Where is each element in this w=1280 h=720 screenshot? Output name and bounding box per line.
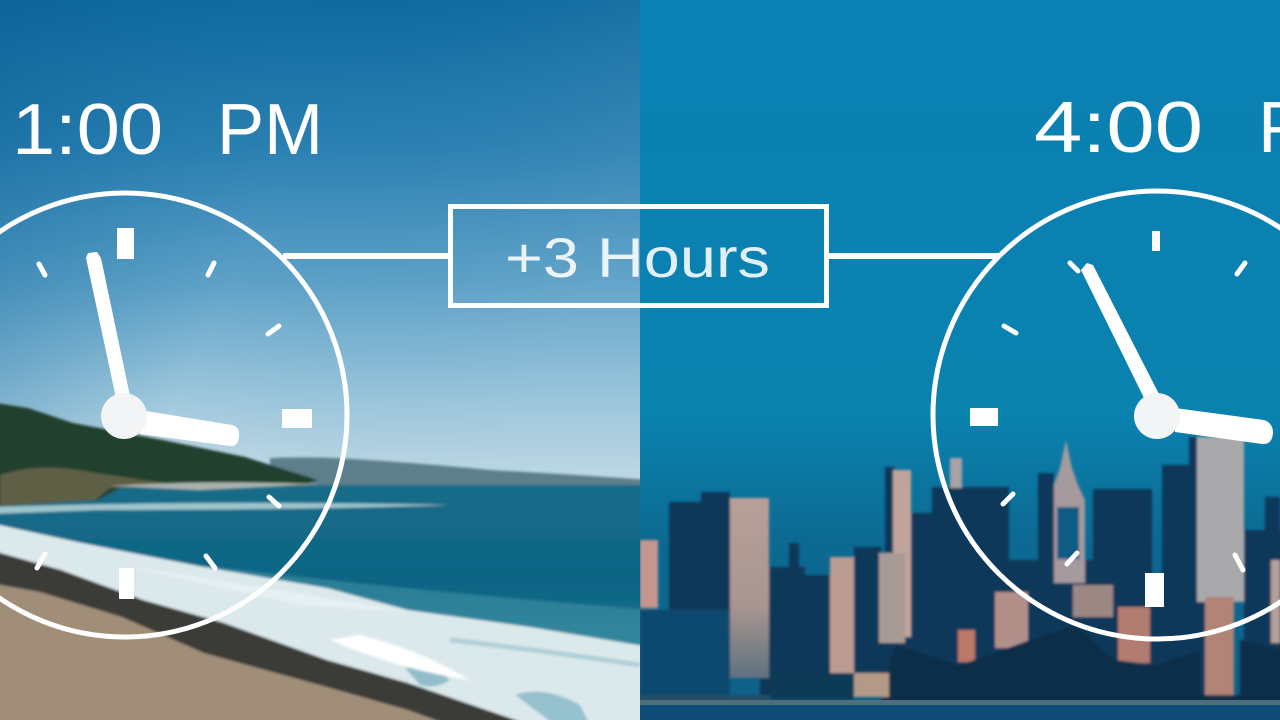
hour hand — [140, 410, 239, 446]
connector: left line — [283, 253, 450, 259]
heading: left time: 1:00 — [12, 90, 163, 170]
minute hand — [86, 252, 130, 398]
panel: beach photo — [0, 0, 650, 720]
hub — [1134, 393, 1180, 439]
skyline dark — [669, 437, 1280, 700]
callout: time difference: +3 Hours — [505, 226, 770, 289]
clock: left 1:00 — [0, 193, 347, 637]
heading: right time: 4:00 — [1034, 88, 1203, 168]
skyline light — [640, 540, 658, 608]
heading: left meridiem: PM — [217, 90, 323, 170]
distant hills — [270, 457, 650, 490]
clock: right 4:00 — [933, 191, 1280, 639]
panel: city photo — [640, 0, 1280, 720]
hub — [101, 393, 147, 439]
minute hand — [1081, 263, 1160, 402]
foreground dark mass — [880, 625, 1280, 702]
rocks and beach — [0, 550, 530, 720]
hour hand — [1175, 408, 1273, 444]
callout: time difference — [450, 206, 826, 306]
connector: right line — [827, 253, 1000, 259]
sea — [0, 484, 640, 646]
surf — [0, 523, 650, 720]
headland — [0, 402, 318, 506]
